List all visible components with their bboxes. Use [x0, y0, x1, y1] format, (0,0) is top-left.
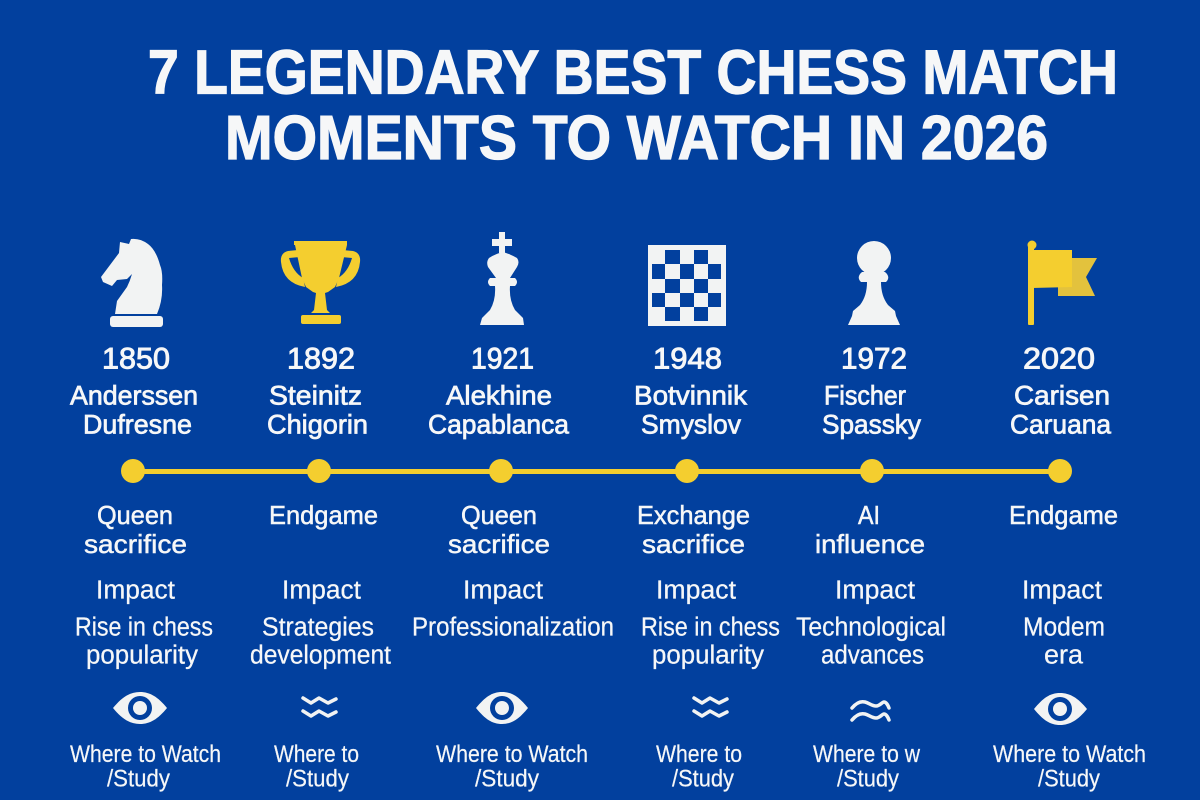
- moment types: Endgame: [269, 500, 378, 530]
- icon: eye 1: [113, 692, 167, 724]
- impact labels and descriptions: Impact: [656, 576, 736, 604]
- years and players: 1850: [102, 342, 170, 376]
- icon: chess board: [648, 245, 726, 326]
- where to watch labels: /Study: [837, 766, 899, 792]
- moment types: Exchange: [637, 500, 750, 530]
- where to watch labels: /Study: [286, 766, 349, 792]
- impact labels and descriptions: era: [1044, 642, 1084, 670]
- impact labels and descriptions: Rise in chess: [75, 614, 213, 642]
- where to watch labels: Where to Watch: [436, 741, 588, 768]
- years and players: 1892: [287, 342, 355, 376]
- moment types: sacrifice: [642, 529, 745, 559]
- where to watch labels: /Study: [107, 766, 170, 792]
- impact labels and descriptions: Impact: [1022, 576, 1102, 604]
- where to watch labels: /Study: [1038, 766, 1100, 792]
- moment types: Endgame: [1009, 500, 1118, 530]
- years and players: Carisen: [1014, 380, 1110, 410]
- impact labels and descriptions: popularity: [652, 642, 764, 670]
- impact labels and descriptions: Rise in chess: [641, 614, 780, 642]
- impact labels and descriptions: Technological: [796, 614, 946, 642]
- icon: pawn: [848, 241, 900, 325]
- years and players: [70, 342, 1112, 440]
- where to watch labels: Where to: [274, 741, 359, 768]
- moment types: Queen: [461, 500, 537, 530]
- moment types: Queen: [97, 500, 173, 530]
- where to watch labels: Where to: [656, 741, 742, 768]
- years and players: Fischer: [824, 380, 906, 410]
- icon: waves 1: [303, 698, 336, 716]
- years and players: Dufresne: [83, 410, 192, 440]
- impact labels and descriptions: Impact: [835, 576, 915, 604]
- years and players: Capablanca: [428, 410, 570, 440]
- years and players: Anderssen: [70, 380, 198, 410]
- moment types: sacrifice: [448, 529, 550, 559]
- icon: waves 2: [694, 698, 727, 716]
- title: MOMENTS TO WATCH IN 2026: [225, 103, 1048, 173]
- years and players: 1972: [841, 342, 907, 376]
- where to watch labels: Where to w: [813, 741, 921, 768]
- icon: trophy: [281, 241, 360, 324]
- moment types: [84, 500, 1118, 559]
- where to watch labels: /Study: [672, 766, 734, 792]
- years and players: Caruana: [1010, 410, 1112, 440]
- impact labels and descriptions: popularity: [86, 642, 198, 670]
- impact labels and descriptions: Impact: [463, 576, 543, 604]
- years and players: Spassky: [822, 410, 921, 440]
- moment types: influence: [815, 529, 925, 559]
- years and players: Botvinnik: [634, 380, 748, 410]
- impact labels and descriptions: Impact: [282, 576, 361, 604]
- years and players: 1948: [653, 342, 722, 376]
- where to watch labels: Where to Watch: [993, 741, 1146, 768]
- years and players: 1921: [471, 342, 534, 376]
- years and players: Alekhine: [446, 380, 552, 410]
- impact labels and descriptions: Impact: [96, 576, 175, 604]
- impact labels and descriptions: Professionalization: [412, 614, 614, 642]
- where to watch labels: /Study: [475, 766, 539, 792]
- icon: waves 3: [852, 702, 889, 720]
- icon: knight: [101, 239, 163, 327]
- moment types: AI: [858, 500, 880, 530]
- years and players: 2020: [1023, 342, 1095, 376]
- icon: eye 2: [476, 692, 528, 724]
- impact labels and descriptions: Strategies: [262, 614, 374, 642]
- icon: eye 3: [1034, 693, 1087, 725]
- timeline: [121, 459, 1072, 483]
- years and players: Steinitz: [269, 380, 362, 410]
- impact labels and descriptions: advances: [821, 642, 924, 670]
- years and players: Smyslov: [641, 410, 741, 440]
- title: [148, 38, 1118, 173]
- where to watch labels: [70, 741, 1146, 792]
- icon: king: [480, 232, 524, 325]
- impact labels and descriptions: development: [250, 642, 391, 670]
- icon: flag: [1028, 240, 1097, 325]
- years and players: Chigorin: [267, 410, 368, 440]
- impact labels and descriptions: Modem: [1023, 614, 1105, 642]
- where to watch labels: Where to Watch: [70, 741, 221, 768]
- moment types: sacrifice: [84, 529, 187, 559]
- impact labels and descriptions: [75, 576, 1105, 670]
